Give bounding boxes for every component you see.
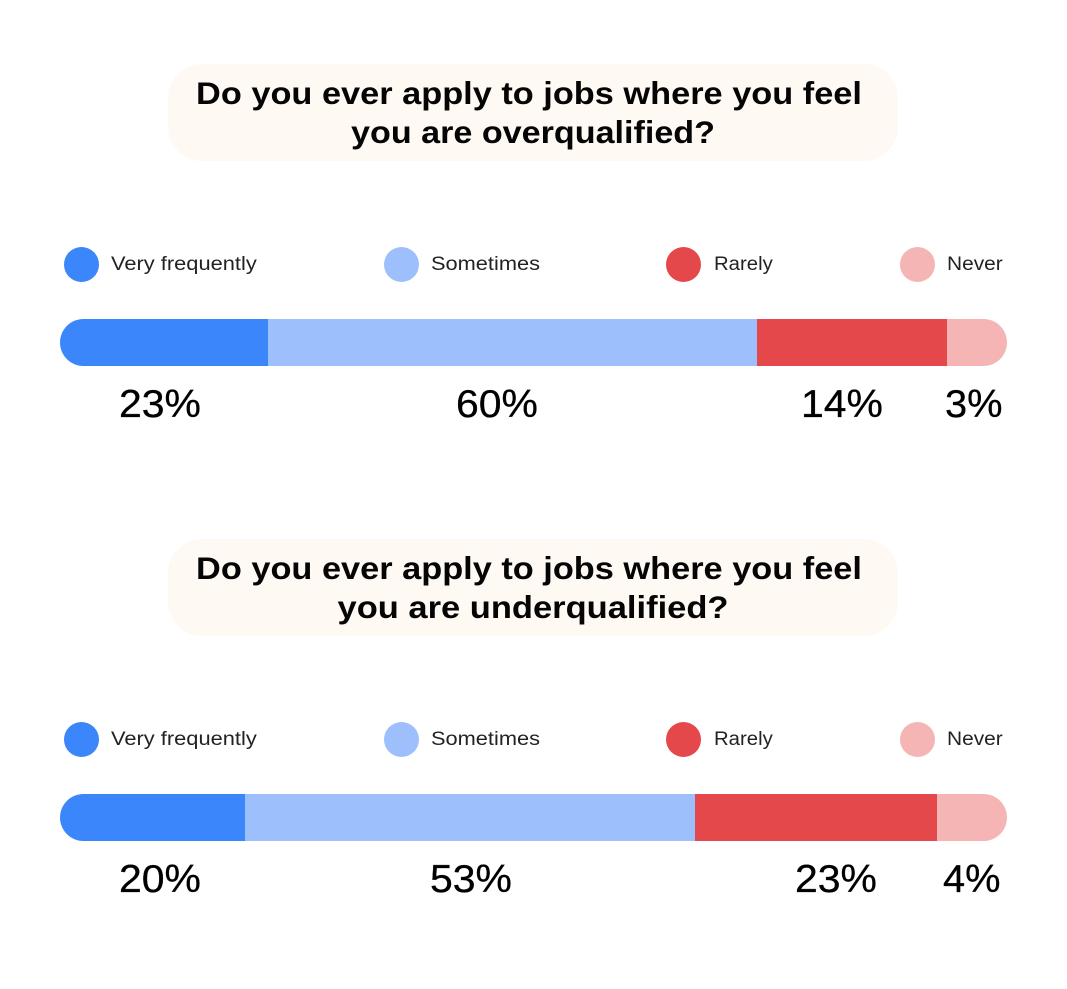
value: 23%: 23% <box>795 858 877 901</box>
stacked bar: underqualified <box>60 794 1007 841</box>
title: underqualified: you are underqualified? <box>338 589 728 625</box>
legend: never: Never <box>947 254 1003 275</box>
legend: never <box>900 722 1003 757</box>
legend: sometimes: Sometimes <box>431 729 540 750</box>
legend: rarely <box>666 722 773 757</box>
panel: overqualified chart <box>60 64 1007 426</box>
value: 53%: 53% <box>430 858 512 901</box>
title: underqualified: Do you ever apply to jobs where you feel <box>196 550 862 586</box>
legend: rarely: Rarely <box>714 254 773 275</box>
value: 14%: 14% <box>801 383 883 426</box>
panel: underqualified chart <box>60 539 1007 901</box>
legend: sometimes: Sometimes <box>431 254 540 275</box>
legend: sometimes <box>384 247 540 282</box>
value: 60%: 60% <box>456 383 538 426</box>
legend: very frequently: Very frequently <box>111 729 257 750</box>
title: overqualified: Do you ever apply to jobs where you feel <box>196 75 862 111</box>
legend: never <box>900 247 1003 282</box>
value: 3%: 3% <box>945 383 1003 426</box>
title: overqualified: you are overqualified? <box>351 114 715 150</box>
legend: very frequently <box>64 247 257 282</box>
stacked bar: overqualified <box>60 319 1007 366</box>
title: underqualified <box>168 539 898 636</box>
value: 4%: 4% <box>943 858 1001 901</box>
legend: very frequently: Very frequently <box>111 254 257 275</box>
value: 20%: 20% <box>119 858 201 901</box>
legend: rarely <box>666 247 773 282</box>
legend: rarely: Rarely <box>714 729 773 750</box>
value: 23%: 23% <box>119 383 201 426</box>
legend: never: Never <box>947 729 1003 750</box>
legend: very frequently <box>64 722 257 757</box>
title: overqualified <box>168 64 898 161</box>
legend: sometimes <box>384 722 540 757</box>
